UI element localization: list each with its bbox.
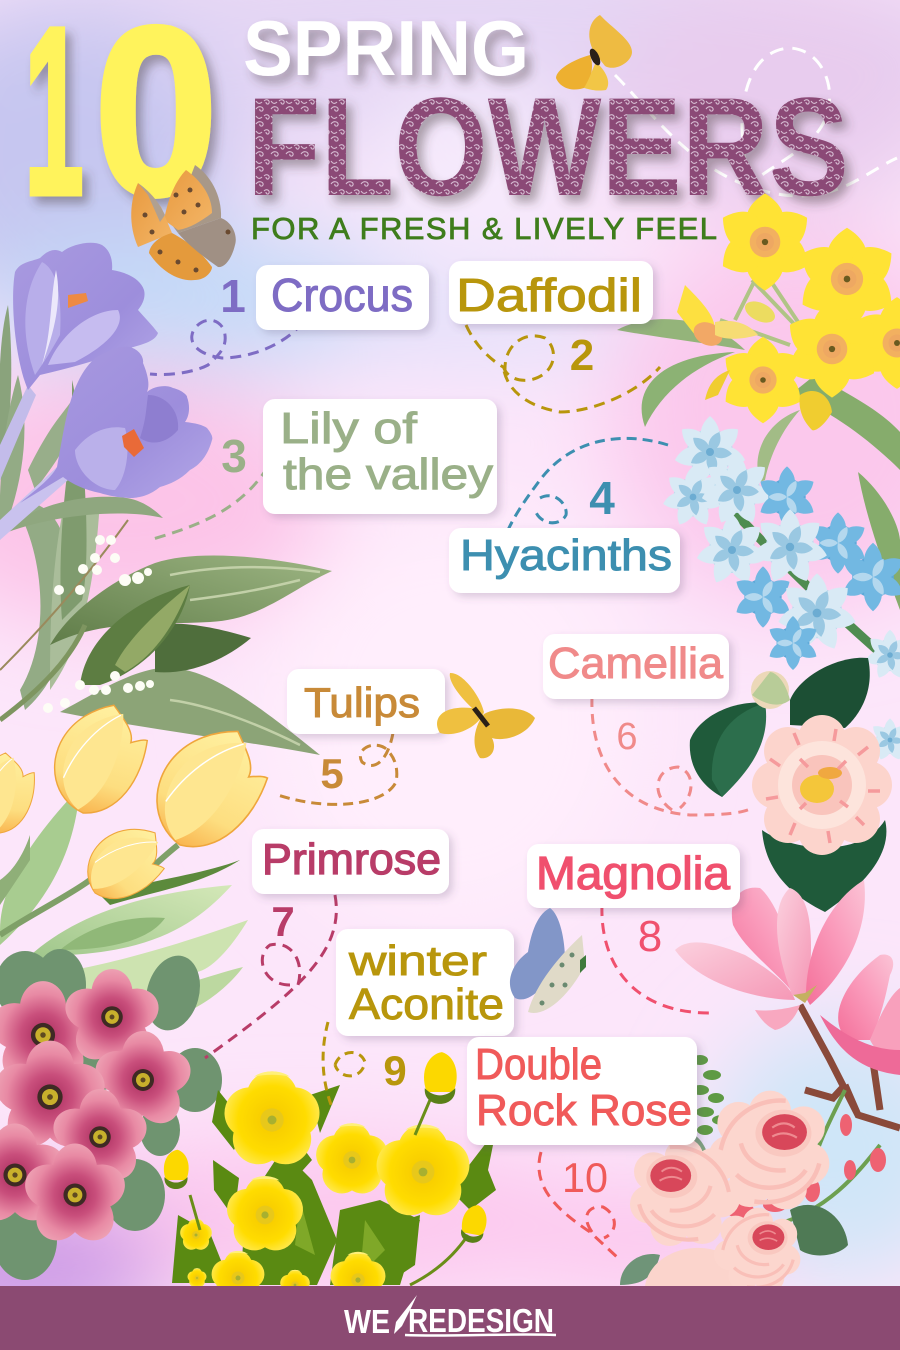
panel: hyacinths label	[449, 528, 680, 593]
number 10: 10	[562, 1154, 608, 1201]
illustration: lily of the valley	[0, 520, 332, 755]
panel: winter aconite label: Aconite	[349, 980, 504, 1029]
panel: tulips label: Tulips	[304, 679, 420, 726]
illustration: magnolia	[675, 880, 900, 1128]
illustration: camellia	[690, 658, 892, 912]
footer bar	[0, 1286, 900, 1350]
illustration: tulips and foliage	[0, 694, 281, 1008]
panel: camellia label	[543, 634, 729, 699]
number 8: 8	[638, 912, 662, 961]
panel: daffodil label: Daffodil	[456, 269, 642, 321]
connector: camellia	[592, 697, 752, 815]
illustration: daffodils	[617, 193, 900, 610]
number 4: 4	[589, 472, 615, 524]
illustration: primrose	[0, 949, 222, 1280]
title: SPRING: SPRING	[243, 4, 529, 92]
panel: primrose label: Primrose	[262, 835, 441, 884]
panel: crocus label	[256, 265, 429, 330]
panel: camellia label: Camellia	[548, 639, 724, 688]
connector: daffodil	[466, 325, 660, 412]
number 7: 7	[271, 898, 295, 945]
panel: tulips label	[287, 669, 445, 734]
icon: orange butterfly	[131, 165, 236, 280]
connector: winter aconite	[323, 1022, 365, 1110]
panel: winter aconite label: winter	[348, 937, 487, 984]
icon: yellow butterfly mid	[437, 673, 535, 758]
panel: double rock rose label: Double	[475, 1040, 602, 1089]
panel: hyacinths label: Hyacinths	[460, 531, 672, 580]
subtitle: FOR A FRESH & LIVELY FEEL	[251, 211, 717, 246]
panel: primrose label	[252, 829, 449, 894]
connector: primrose	[205, 895, 336, 1058]
illustration: hyacinths	[661, 416, 900, 762]
white dashed decorative path	[615, 48, 897, 196]
footer logo	[344, 1295, 556, 1340]
footer logo: WE	[344, 1303, 390, 1340]
panel: double rock rose label: Rock Rose	[476, 1086, 692, 1135]
icon: blue butterfly	[510, 908, 586, 1013]
number 3: 3	[221, 430, 247, 482]
panel: double rock rose label	[467, 1037, 697, 1145]
panel: daffodil label	[449, 261, 653, 324]
icon: yellow butterfly top	[556, 15, 632, 91]
illustration: crocus flowers	[0, 243, 212, 540]
number 9: 9	[383, 1047, 407, 1094]
number 1: 1	[220, 270, 246, 322]
connector: magnolia	[602, 905, 715, 1013]
illustration: sage blades left	[0, 305, 163, 710]
illustration: roses	[620, 1055, 886, 1292]
panel: crocus label: Crocus	[271, 269, 413, 321]
connector: crocus	[150, 320, 303, 375]
illustration: winter aconite	[164, 1052, 496, 1311]
connector: double rock rose	[539, 1152, 618, 1258]
panel: lily of the valley label	[263, 399, 497, 514]
panel: lily of the valley label: the valley	[283, 450, 493, 499]
panel: lily of the valley label: Lily of	[280, 404, 418, 453]
connector: hyacinths	[508, 438, 668, 530]
panel: magnolia label: Magnolia	[536, 847, 730, 899]
number 2: 2	[570, 331, 594, 380]
panel: winter aconite label	[336, 929, 514, 1036]
connector: lily of the valley	[153, 467, 268, 539]
footer logo: REDESIGN	[408, 1302, 554, 1339]
connector: tulips	[278, 733, 397, 804]
number 5: 5	[320, 750, 344, 797]
number 6: 6	[616, 716, 638, 758]
